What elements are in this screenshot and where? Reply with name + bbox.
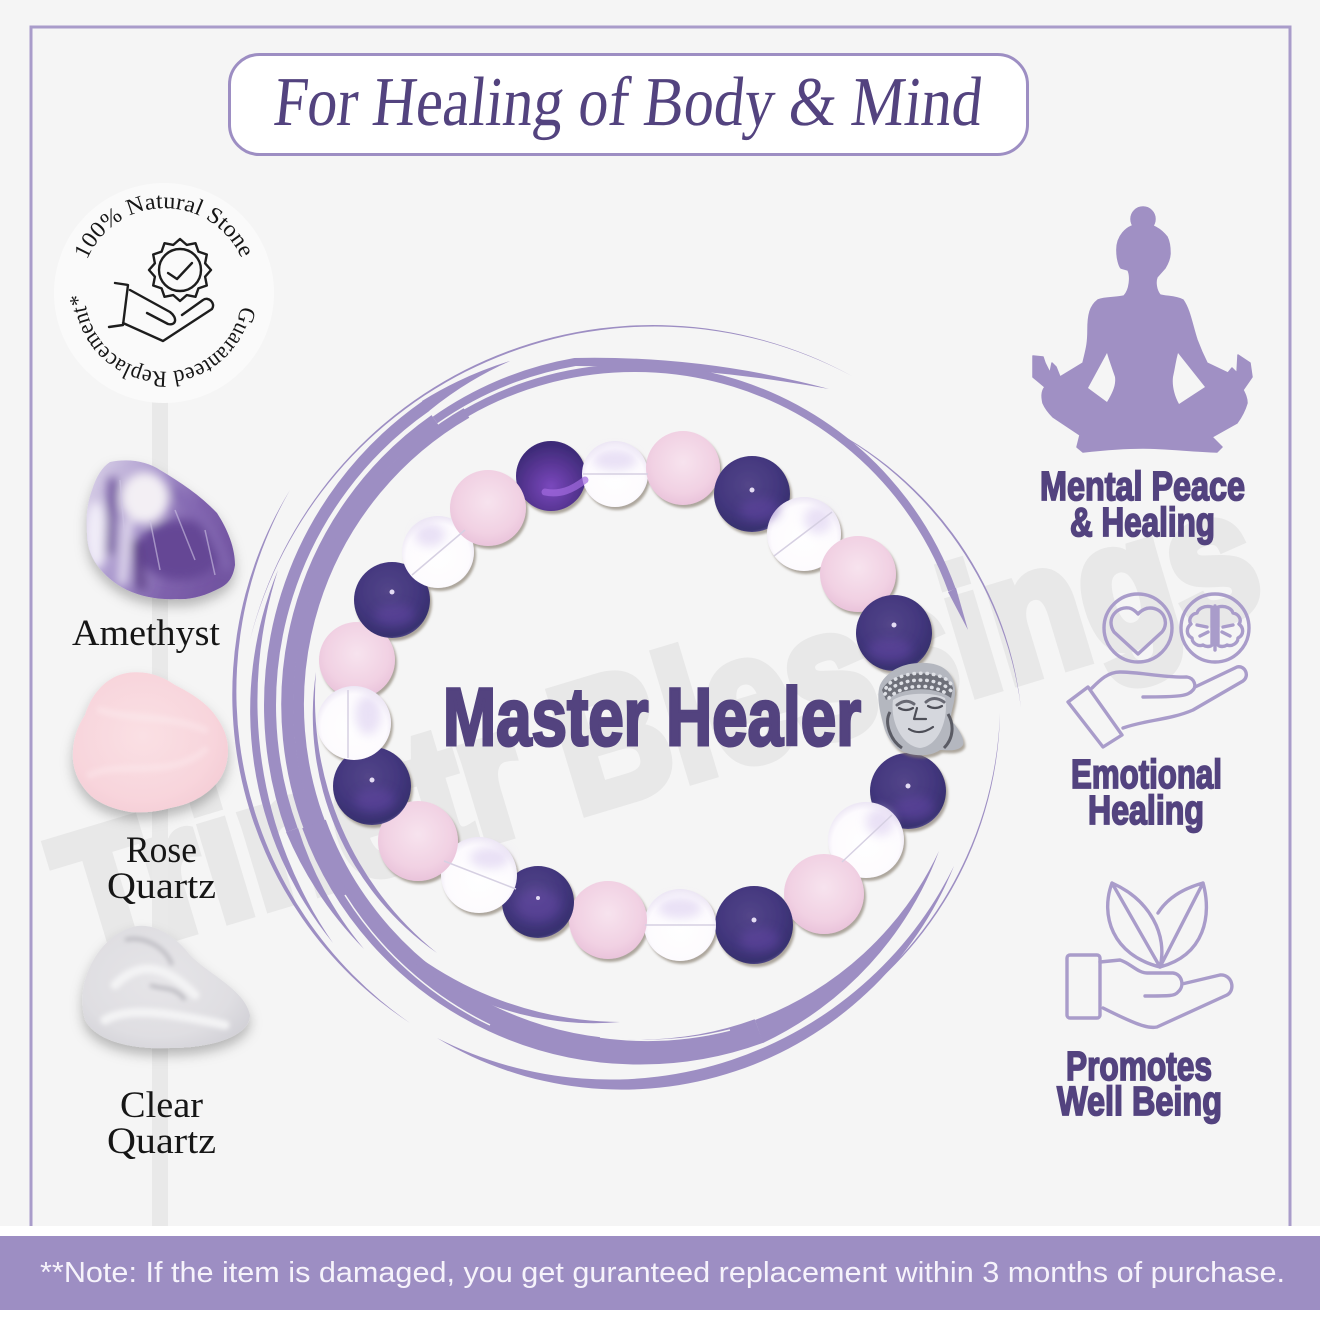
icon: leaves over open hand [1067,883,1232,1027]
footer note band [0,1236,1320,1310]
icon: heart and brain over open hand [1068,594,1249,747]
title banner: For Healing of Body & Mind [270,63,986,141]
footer note band: **Note: If the item is damaged, you get guranteed replacement within 3 months of purchase. [40,1257,1285,1289]
label: Amethyst: Amethyst [72,613,221,654]
brush swirl circle [232,325,1021,1090]
label: Rose Quartz: Quartz [107,866,216,907]
label: Mental Peace & Healing: Mental Peace [1040,463,1245,509]
Buddha charm [878,663,963,755]
bead details [348,449,935,952]
icon: meditating figure [1033,207,1252,452]
label: Promotes Well Being: Promotes [1066,1043,1212,1089]
beads [317,431,946,964]
bracelet [317,431,963,964]
badge: 100% natural stone: 100% Natural Stone [76,195,250,258]
label: Mental Peace & Healing [1040,463,1245,545]
label: Clear Quartz: Clear [120,1085,203,1126]
white strip under footer [0,1310,1320,1320]
label: Clear Quartz: Quartz [107,1121,216,1162]
label: Emotional Healing: Healing [1088,787,1204,833]
label: Promotes Well Being: Well Being [1057,1078,1222,1124]
label: Emotional Healing [1071,751,1222,833]
white gap above footer [0,1226,1320,1236]
title banner [230,54,1028,154]
label: Clear Quartz [107,1085,216,1162]
stone: rose quartz [73,672,228,812]
label: Promotes Well Being [1057,1043,1222,1124]
label: Rose Quartz [107,830,216,907]
heading: Master Healer: Master Healer [443,672,861,763]
badge: 100% natural stone [70,195,254,403]
badge: 100% natural stone: Guaranteed Replacement* [70,296,254,387]
vertical strip behind stones [152,400,168,1226]
stone: amethyst [84,460,235,599]
stone: clear quartz [82,926,250,1048]
label: Emotional Healing: Emotional [1071,751,1222,797]
label: Mental Peace & Healing: & Healing [1070,499,1215,545]
label: Rose Quartz: Rose [126,830,197,871]
